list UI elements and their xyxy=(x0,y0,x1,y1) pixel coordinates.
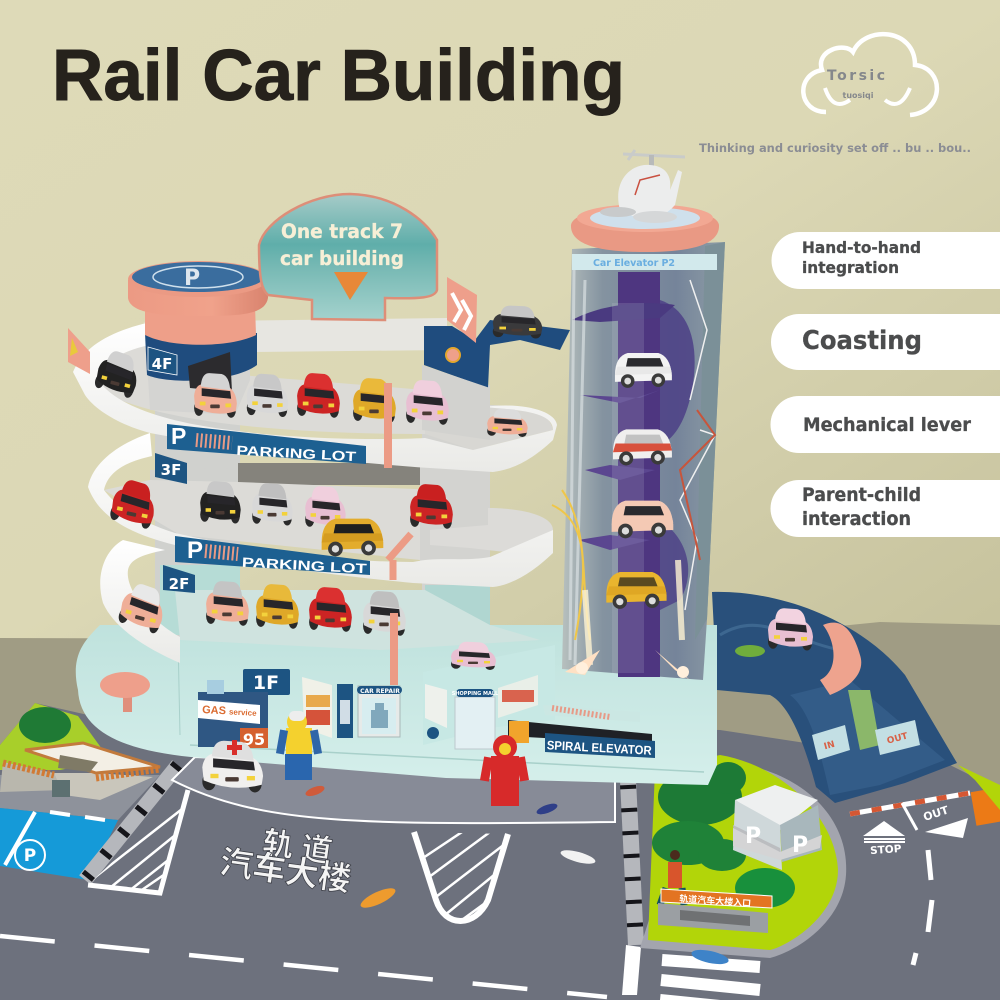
left park xyxy=(0,703,110,770)
purple core xyxy=(618,272,660,677)
gas station: GAS service xyxy=(202,704,257,719)
crosswalk xyxy=(660,960,760,1000)
sign: one track 7 car building xyxy=(259,194,437,320)
4F sign: 4F xyxy=(152,355,172,373)
logo: Torsic cloud: Torsic xyxy=(827,68,885,84)
lever level 2 xyxy=(390,613,398,685)
metal sign stand xyxy=(658,903,768,933)
spiral elevator sign: SPIRAL ELEVATOR xyxy=(546,738,652,758)
worker figure xyxy=(660,850,684,905)
3F sign xyxy=(155,453,187,484)
U hatch area xyxy=(414,830,510,925)
1F sign: 1F xyxy=(253,672,279,694)
sign: one track 7 car building: One track 7 xyxy=(281,220,403,243)
tagline: Thinking and curiosity set off .. bu .. bou.. xyxy=(699,141,971,155)
feature pill: hand-to-hand integration: Hand-to-hand xyxy=(802,238,921,257)
level 3 deck xyxy=(88,433,553,587)
car repair sign xyxy=(357,686,402,737)
feature pill: hand-to-hand integration: integration xyxy=(802,258,899,277)
mint ground floor xyxy=(76,625,717,785)
title: Rail Car Building xyxy=(52,36,625,116)
sign: one track 7 car building: car building xyxy=(280,247,404,270)
spiral elevator sign xyxy=(508,705,655,758)
P roof drum xyxy=(128,261,268,316)
grey border right xyxy=(640,760,846,958)
level 4 deck xyxy=(73,318,557,472)
feature pill: parent-child interaction xyxy=(770,480,1000,537)
shopping mall front xyxy=(423,645,555,749)
figure: worker in yellow vest xyxy=(276,711,322,780)
sidewalk xyxy=(172,757,615,823)
zebra bar xyxy=(622,945,641,995)
right green strip xyxy=(958,765,1000,810)
parking lot banner 1 xyxy=(167,423,366,464)
parking booth: P xyxy=(745,824,761,849)
level 2 deck xyxy=(100,540,540,663)
helipad xyxy=(571,204,719,252)
P roof drum: P xyxy=(184,266,200,291)
car repair sign: CAR REPAIR xyxy=(360,688,400,695)
kerb right xyxy=(628,780,636,945)
left hatched area xyxy=(88,789,190,896)
shopping mall front: SHOPPING MALL xyxy=(452,691,499,697)
3F sign: 3F xyxy=(161,461,181,479)
blue bridge junction xyxy=(422,320,570,440)
green park xyxy=(648,755,838,950)
gas station xyxy=(198,680,268,749)
parking lot banner 1: PARKING LOT xyxy=(236,443,358,464)
lever level 3 xyxy=(388,534,411,580)
blue ramp and turntable xyxy=(712,592,957,803)
lever level 4 xyxy=(384,383,392,468)
right road markings xyxy=(863,803,968,965)
right road markings: STOP xyxy=(870,843,902,857)
2F sign: 2F xyxy=(169,575,189,593)
floor xyxy=(0,622,1000,1000)
feature pill: mechanical lever xyxy=(770,396,1000,453)
right road markings: OUT xyxy=(922,803,951,824)
table xyxy=(100,672,150,712)
elevator cars xyxy=(606,353,673,609)
parking lot banner 2: P xyxy=(187,537,203,564)
skateboards xyxy=(304,784,730,967)
bakery building xyxy=(0,743,160,800)
background wall xyxy=(0,0,1000,640)
shop shelves xyxy=(302,677,332,738)
gas station: 95 xyxy=(243,730,265,749)
feature pill: parent-child interaction: interaction xyxy=(802,508,911,530)
feature pill: hand-to-hand integration xyxy=(772,232,1000,289)
parking lot banner 1: P xyxy=(171,423,186,449)
level 4 column xyxy=(145,305,257,415)
car: pink on ramp xyxy=(768,608,813,650)
2F sign xyxy=(163,565,195,593)
road centre dashes xyxy=(0,936,607,997)
helicopter xyxy=(600,150,685,223)
1F sign xyxy=(243,669,290,695)
feature pill: coasting xyxy=(771,314,1000,370)
parking lot banner 2 xyxy=(175,536,370,576)
mat title: 轨道 xyxy=(260,817,344,872)
feature pill: mechanical lever: Mechanical lever xyxy=(803,414,972,436)
logo: Torsic cloud xyxy=(803,34,937,115)
feature pill: coasting: Coasting xyxy=(802,326,922,356)
entrance sign: 轨道汽车大楼入口 xyxy=(679,892,752,910)
logo: Torsic cloud: tuosiqi xyxy=(842,91,874,100)
level 2 cars xyxy=(117,580,496,670)
parking lot banner 2: PARKING LOT xyxy=(241,555,368,576)
vending machine xyxy=(337,684,353,738)
parking booth xyxy=(733,785,822,870)
play mat xyxy=(0,703,1000,1000)
figure: racer in red xyxy=(480,735,529,806)
spiral elevator glass tower xyxy=(552,242,725,680)
play mat: P xyxy=(24,846,36,866)
feature pill: parent-child interaction: Parent-child xyxy=(802,484,921,506)
mat title: 汽车大楼 xyxy=(217,835,355,901)
level 3 cars xyxy=(109,477,453,556)
chevron sign xyxy=(447,277,477,343)
tile plaza xyxy=(0,775,160,820)
blue ramp and turntable: IN xyxy=(823,740,836,752)
tower columns xyxy=(155,340,490,640)
blue parking xyxy=(0,808,118,880)
left kerb xyxy=(85,765,178,880)
barrier gate xyxy=(850,787,1000,830)
parking booth: P xyxy=(792,833,808,858)
toy ambulance xyxy=(202,740,263,792)
spiral elevator glass tower: Car Elevator P2 xyxy=(593,258,675,269)
entrance sign xyxy=(661,889,772,910)
blue ramp and turntable: OUT xyxy=(886,731,910,747)
left warning sign xyxy=(68,328,90,374)
level 4 cars xyxy=(93,306,542,437)
